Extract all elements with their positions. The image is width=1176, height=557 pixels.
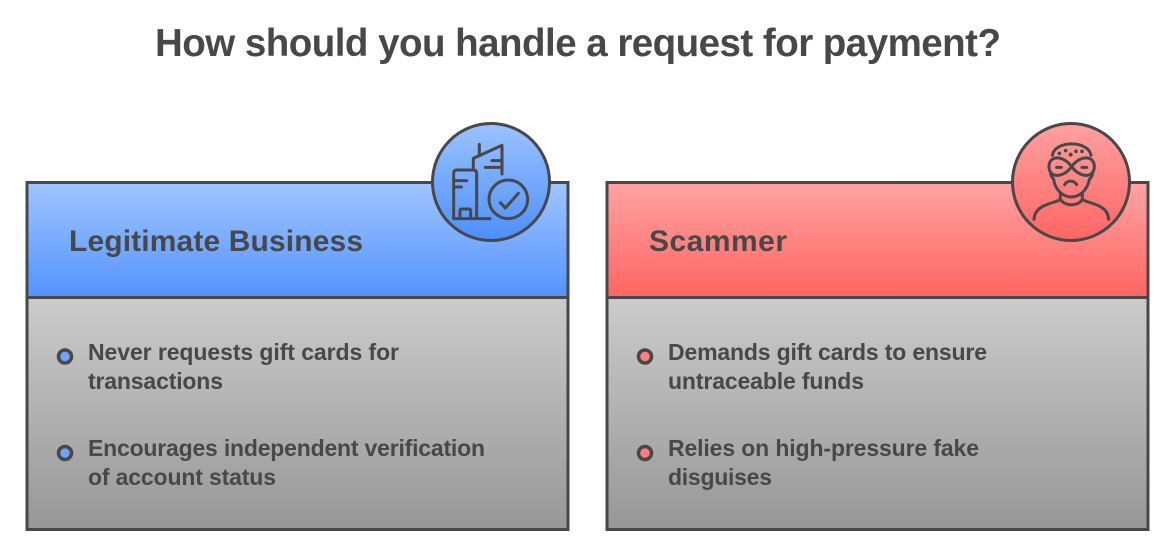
bullet: never requests gift cards: Never requests gift cards for [88,339,399,365]
header band: scammer [607,182,1148,298]
bullet: demands gift cards: Demands gift cards to ensure [668,339,987,365]
header band: legitimate business [27,182,568,298]
body: legitimate business [27,298,568,530]
title: How should you handle a request for payment? [155,22,1001,65]
heading: legitimate business: Legitimate Business [69,225,363,258]
bullet: never requests gift cards [58,339,399,394]
bullet: never requests gift cards: transactions [88,368,223,394]
bullet: encourages verification: of account status [88,464,276,490]
bullet: demands gift cards: untraceable funds [668,368,864,394]
panel: legitimate business [27,124,568,530]
bullet: encourages verification: Encourages independent verification [88,435,485,461]
panel: scammer [607,124,1148,530]
icon: masked scammer [1012,124,1130,240]
body: scammer [607,298,1148,530]
bullet: relies on fake disguises: Relies on high-pressure fake [668,435,979,461]
bullet: demands gift cards [638,339,987,394]
bullet: relies on fake disguises: disguises [668,464,772,490]
bullet: relies on fake disguises [638,435,979,490]
bullet: encourages verification [58,435,485,490]
icon: building with check mark [432,124,550,240]
heading: scammer: Scammer [649,225,787,258]
